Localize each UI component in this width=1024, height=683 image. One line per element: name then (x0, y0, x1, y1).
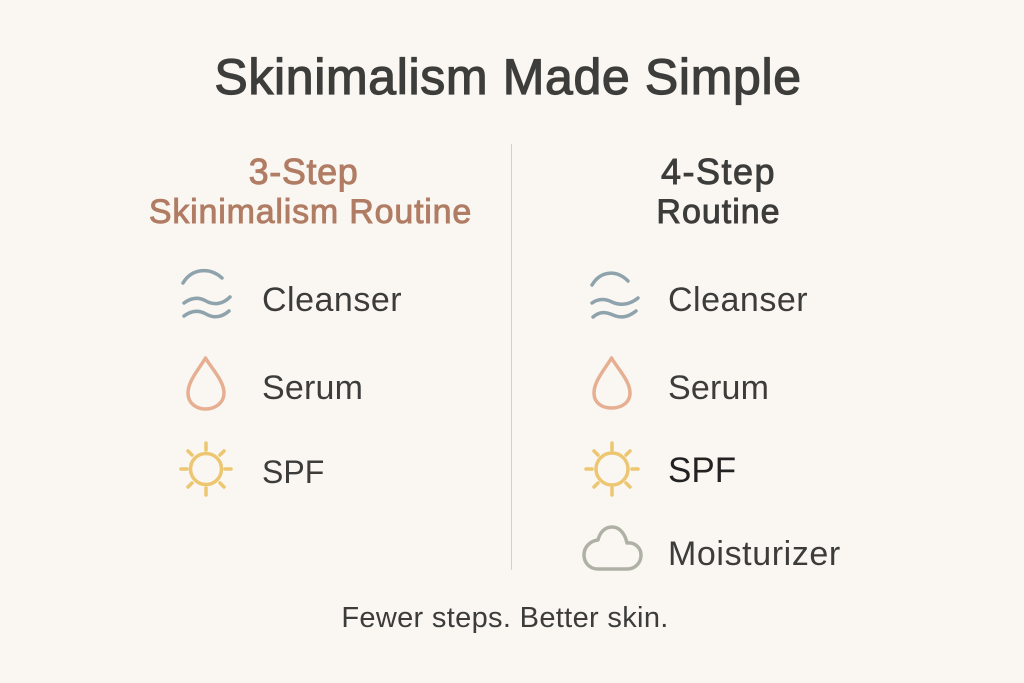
heading: 3-step (149, 151, 472, 231)
label: moisturizer: Moisturizer (668, 535, 841, 573)
label: cleanser: Cleanser (668, 281, 808, 319)
heading: 4-step: Routine (656, 193, 781, 231)
divider (511, 144, 512, 570)
heading: 4-step (656, 151, 781, 231)
icon: drop (592, 356, 632, 410)
label: cleanser: Cleanser (262, 281, 402, 319)
icon: waves (590, 271, 640, 319)
heading: 3-step: 3-Step (249, 151, 358, 192)
label: serum: Serum (262, 369, 363, 407)
heading: 3-step: Skinimalism Routine (149, 193, 472, 231)
icon: sun (179, 441, 233, 497)
icon: cloud (582, 525, 643, 571)
icon: sun (584, 441, 640, 497)
label: SPF: SPF (668, 451, 736, 490)
tagline: Fewer steps. Better skin. (341, 602, 669, 634)
icon: waves (181, 268, 232, 318)
panel: 3-step routine (149, 151, 472, 497)
title: Skinimalism Made Simple (214, 49, 802, 105)
heading: 4-step: 4-Step (661, 151, 776, 192)
label: SPF: SPF (262, 454, 324, 490)
panel: 4-step routine (582, 151, 841, 573)
icon: drop (186, 356, 226, 411)
label: serum: Serum (668, 369, 769, 407)
